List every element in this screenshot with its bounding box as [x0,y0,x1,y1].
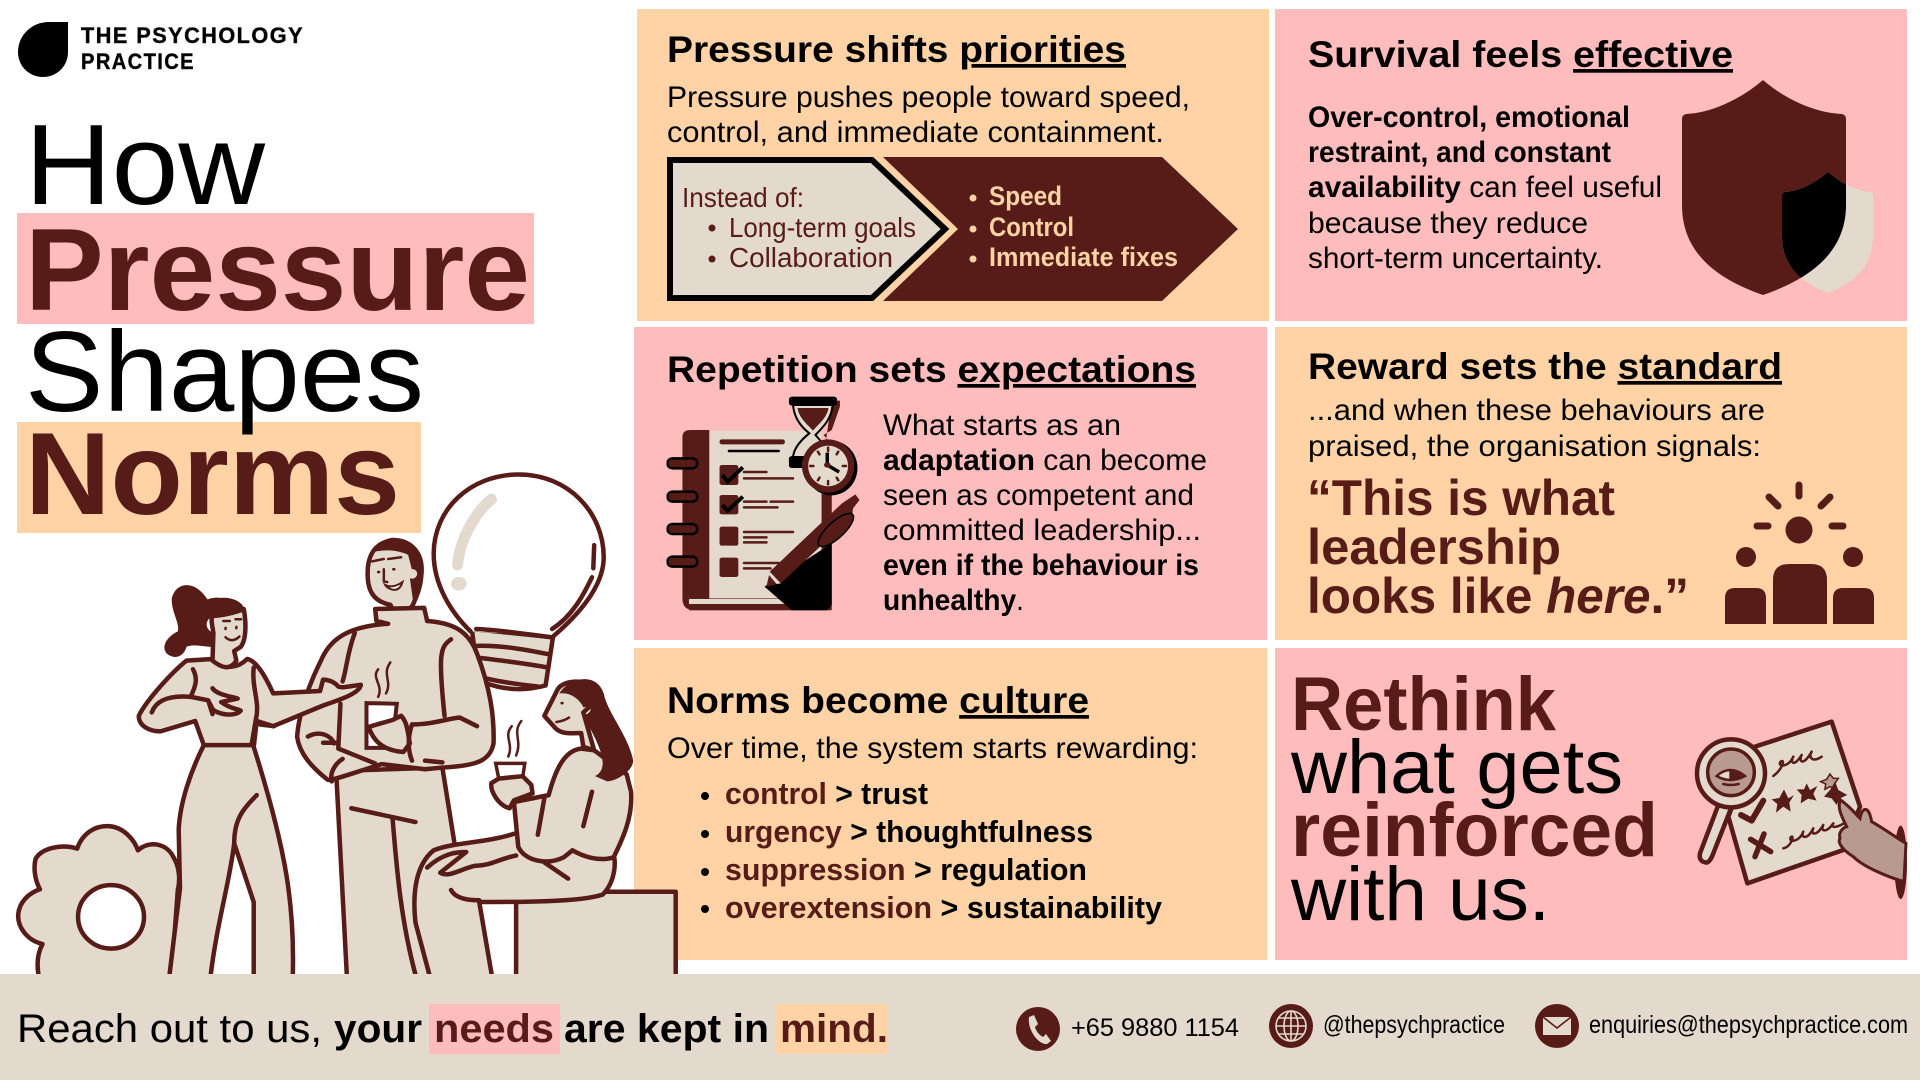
panel: norms become culture [634,648,1267,960]
stars [1772,783,1817,813]
body text: What starts as an [883,409,1121,442]
quote: leadership [1307,519,1561,575]
hourglass [789,397,840,468]
logo [18,22,304,77]
paper [1728,722,1860,883]
logo wordmark [81,23,304,74]
contact: phone: +65 9880 1154 [1071,1014,1239,1042]
arrow: instead of: Collaboration [729,242,893,273]
heading: Pressure shifts priorities [667,29,1126,70]
contact: website [1269,1004,1505,1048]
seated woman and box [414,679,676,981]
icon: logo drop [18,22,68,77]
body text: availability can feel useful [1308,171,1662,204]
man [297,539,494,978]
title: Norms [25,408,400,539]
arrow: instead of: Instead of: [682,182,804,213]
panel: rethink what gets reinforced [1275,648,1907,960]
footer tagline [17,1004,888,1054]
body text: control, and immediate containment. [667,116,1164,149]
body text [1308,394,1765,463]
magnifier [1697,739,1765,863]
body text: committed leadership... [883,514,1201,547]
title: How [25,102,266,229]
title [17,102,534,539]
bullet list [701,776,1163,925]
contact: website: @thepsychpractice [1323,1011,1505,1039]
bullet list: urgency > thoughtfulness [725,814,1093,849]
footer tagline: Reach out to us, [17,1007,322,1051]
panel: repetition sets expectations [634,327,1267,640]
body text [883,409,1207,617]
call to action text: what gets [1290,725,1623,810]
body text: short-term uncertainty. [1308,242,1603,275]
body text: even if the behaviour is [883,549,1199,582]
icon: review sheet, magnifier and hand [1697,722,1907,899]
arrow: priorities under pressure [883,157,1238,301]
body text: adaptation can become [883,444,1207,477]
logo wordmark: PRACTICE [81,49,195,74]
body text: ...and when these behaviours are [1308,394,1765,427]
heading: Norms become culture [667,680,1089,721]
bullet list: suppression > regulation [725,852,1087,887]
arrow: priorities under pressure: Control [989,212,1074,242]
panel: pressure shifts priorities [637,9,1269,321]
footer tagline: mind. [780,1007,888,1051]
quote: looks like here.” [1307,568,1689,624]
body text: Pressure pushes people toward speed, [667,81,1190,114]
call to action text [1290,662,1658,937]
pen [766,494,860,587]
contact: email [1535,1004,1908,1048]
icon: notebook, hourglass and clock [668,397,860,610]
arrow: instead of: Long-term goals [729,212,916,243]
footer tagline: your [334,1007,422,1051]
body text: Over-control, emotional [1308,101,1630,134]
lightbulb [434,474,604,689]
body text [667,81,1190,149]
arrow: priorities under pressure: Immediate fixes [989,242,1178,272]
body text: restraint, and constant [1308,136,1611,169]
arrow: instead of [670,160,945,298]
panel: survival feels effective [1275,9,1907,321]
contact: phone [1016,1007,1239,1051]
call to action text: reinforced [1291,788,1658,873]
quote [1307,470,1689,624]
icon: leader and team [1725,485,1874,624]
heading: Repetition sets expectations [667,349,1196,390]
gear [18,826,179,978]
woman with ponytail [139,585,361,978]
footer tagline: are kept in [564,1007,769,1051]
body text [1308,101,1662,275]
illustration: people with lightbulb and gear [18,474,676,981]
quote: “This is what [1307,470,1615,526]
hand [1839,800,1907,899]
body text: because they reduce [1308,207,1588,240]
footer tagline: needs [434,1007,554,1051]
call to action text: Rethink [1291,662,1557,747]
clock [802,439,857,495]
title: Shapes [25,309,424,436]
logo wordmark: THE PSYCHOLOGY [81,23,304,48]
bullet list: control > trust [725,776,928,811]
title: Pressure [25,204,530,335]
footer band [0,974,1920,1080]
body text: seen as competent and [883,479,1194,512]
body text: Over time, the system starts rewarding: [667,732,1198,765]
bullet list: overextension > sustainability [725,890,1163,925]
body text: unhealthy. [883,584,1024,617]
body text: praised, the organisation signals: [1308,430,1761,463]
heading: Survival feels effective [1308,34,1733,75]
heading: Reward sets the standard [1308,346,1782,387]
icon: shields [1682,80,1873,295]
call to action text: with us. [1290,852,1550,937]
arrow: priorities under pressure: Speed [989,181,1062,211]
panel: reward sets the standard [1275,327,1907,640]
